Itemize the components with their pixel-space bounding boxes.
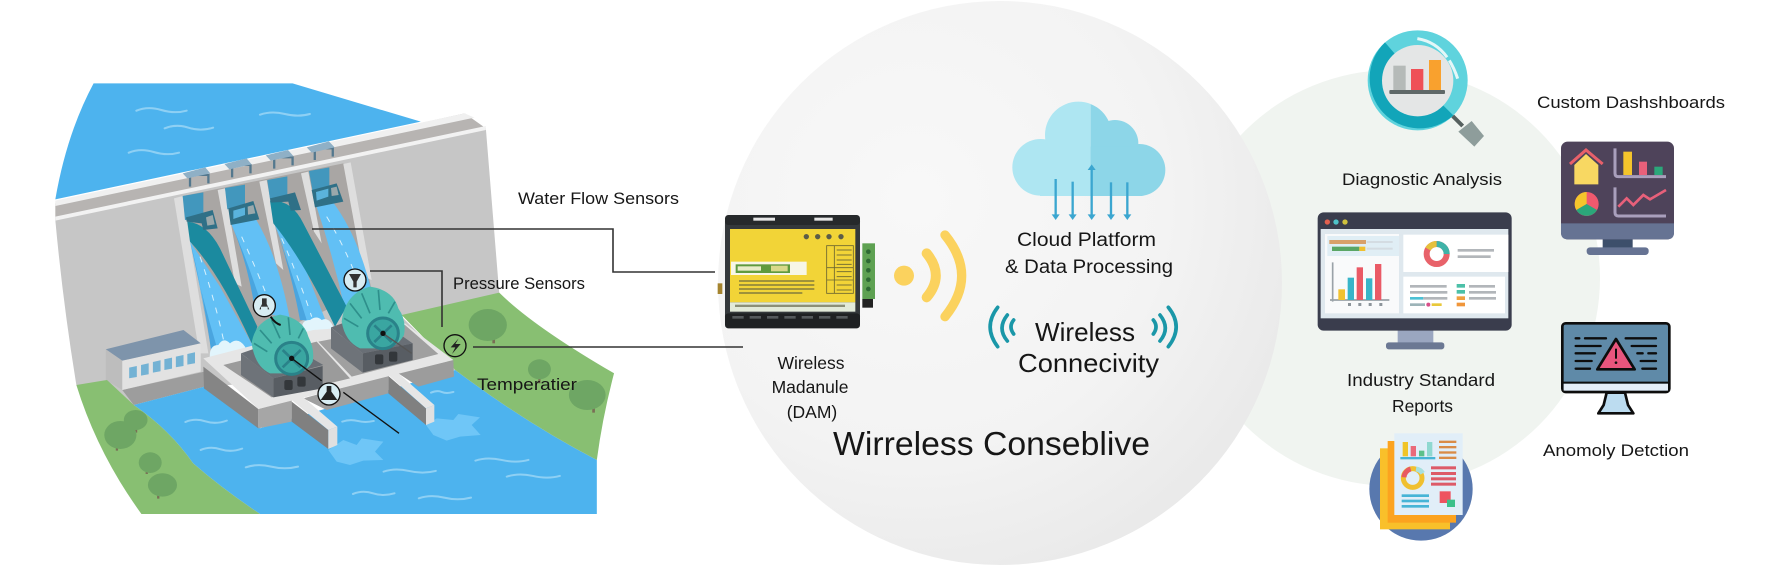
icon: flow sensor [253, 295, 275, 317]
label: wireless module [772, 353, 848, 422]
label: cloud platform: Cloud Platform [1017, 230, 1156, 251]
panel: hydro dam illustration [55, 83, 614, 514]
icon: custom dashboard monitor [1561, 142, 1674, 255]
panel: analytics icons [1318, 30, 1674, 541]
label: pressure sensors: Pressure Sensors [453, 274, 585, 293]
label: wireless connectivity [1018, 317, 1159, 378]
label: diagnostic analysis: Diagnostic Analysis [1342, 170, 1502, 189]
icon: power sensor [444, 335, 466, 357]
label: industry standard reports: Industry Standard [1347, 370, 1495, 390]
label: temperature: Temperatier [477, 375, 577, 394]
connector: pressure sensor line [370, 271, 442, 327]
turbine wheel left [252, 315, 313, 374]
dam body and reservoir [55, 83, 499, 405]
label: wireless module: Madanule [772, 377, 848, 397]
label: cloud platform [1005, 230, 1173, 278]
panel: pale green analytics circle [1184, 70, 1600, 486]
label: industry standard reports [1347, 370, 1495, 416]
panel: connectivity graphics [894, 102, 1176, 347]
foam [210, 317, 333, 360]
splashes [328, 414, 481, 465]
turbine housing left [241, 340, 323, 397]
turbine housing right [331, 313, 413, 373]
gate windows [206, 187, 339, 226]
panel: connectivity circle [718, 1, 1282, 565]
icon: magnifier chart [1368, 30, 1484, 147]
fall highlights [200, 217, 360, 347]
label: anomaly detection: Anomoly Detction [1543, 441, 1689, 460]
connector: temperature line [473, 346, 743, 348]
heading: wireless conseblive: Wirreless Conseblive [833, 425, 1150, 462]
penstocks [187, 201, 347, 343]
label: wireless connectivity: Wireless [1035, 317, 1135, 347]
turbine platform [203, 269, 481, 465]
label: industry standard reports: Reports [1392, 396, 1453, 416]
water falls [190, 203, 372, 357]
gate frames [186, 183, 343, 230]
icon: cloud [1012, 102, 1165, 220]
icon: report monitor [1318, 212, 1512, 349]
icon: pressure sensor [344, 269, 366, 291]
label: water flow sensors: Water Flow Sensors [518, 189, 679, 208]
icon: yellow wireless signal [894, 235, 962, 317]
label: custom dashboards: Custom Dashshboards [1537, 93, 1725, 112]
fall shadows [191, 225, 307, 355]
icon: anomaly alert monitor [1562, 323, 1669, 413]
icon: lower sensor [318, 383, 340, 405]
spillway bays [174, 162, 372, 360]
icon: report documents [1369, 433, 1473, 541]
label: wireless module: Wireless [777, 353, 845, 373]
device: wireless module [718, 215, 875, 328]
building, tailwater and banks [76, 293, 614, 514]
sensor leader strokes [271, 317, 412, 433]
label: wireless module: (DAM) [787, 402, 837, 422]
piers [292, 373, 434, 449]
label: wireless connectivity: Connecivity [1018, 348, 1159, 378]
icon: teal wireless waves [990, 307, 1176, 347]
turbine wheel right [342, 287, 405, 349]
label: cloud platform: & Data Processing [1005, 257, 1173, 278]
connector: water flow sensor line [312, 229, 715, 272]
